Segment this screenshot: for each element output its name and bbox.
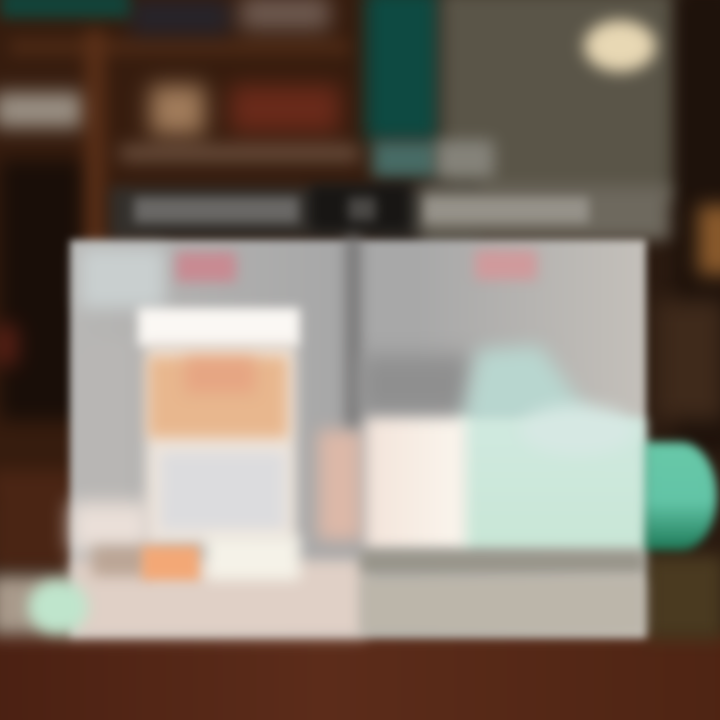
orange tag	[142, 546, 200, 580]
icon: pendant lamp	[584, 20, 656, 72]
title: left word	[134, 197, 299, 223]
cup band: grey-blue	[160, 452, 285, 530]
cup lid	[138, 308, 300, 346]
panel: right column	[354, 246, 656, 645]
left lower light band	[0, 575, 75, 635]
left column top highlight	[80, 248, 165, 308]
teal label above title	[372, 140, 438, 178]
lower right brown wall	[655, 300, 720, 420]
lower left white block	[70, 502, 150, 552]
cup body	[146, 344, 296, 544]
mint mound peak	[455, 340, 581, 422]
left footer	[70, 560, 365, 638]
grey strip	[360, 550, 646, 574]
title: right backing	[420, 185, 670, 240]
cup band: orange	[148, 356, 288, 438]
mint body top highlight	[520, 405, 635, 455]
icon: mint blob, lower left	[28, 580, 88, 634]
left heading pill	[176, 252, 236, 282]
panel: left column	[54, 235, 369, 650]
left table edge	[0, 470, 75, 570]
icon: green cup side	[645, 442, 717, 550]
right footer	[360, 576, 646, 636]
peach edge	[318, 430, 362, 540]
mint body	[460, 418, 646, 550]
teal top-left strip	[0, 0, 130, 18]
right column amber object	[698, 205, 720, 275]
panel: infographic card	[54, 229, 656, 650]
title: centre letter	[348, 197, 376, 221]
teal column, top centre	[365, 0, 440, 140]
divider between columns	[346, 236, 360, 426]
right dark column	[675, 0, 720, 450]
heading: title band	[107, 178, 680, 250]
title: right word	[424, 197, 589, 223]
floor / table surface	[0, 632, 720, 720]
right table edge	[645, 555, 720, 640]
title: centre separator	[310, 185, 410, 231]
panel background	[70, 240, 646, 638]
left column side tone	[82, 340, 132, 510]
right heading pill	[475, 250, 537, 280]
grey tag	[92, 546, 147, 576]
grey label above title	[436, 140, 494, 178]
right column shadow area	[360, 355, 470, 415]
wall and shelving, left	[0, 0, 380, 500]
white block	[366, 418, 466, 550]
cream block	[206, 536, 300, 580]
title band: dark backing	[110, 187, 480, 239]
cup band highlight	[185, 358, 255, 393]
grey wall, right	[440, 0, 680, 200]
